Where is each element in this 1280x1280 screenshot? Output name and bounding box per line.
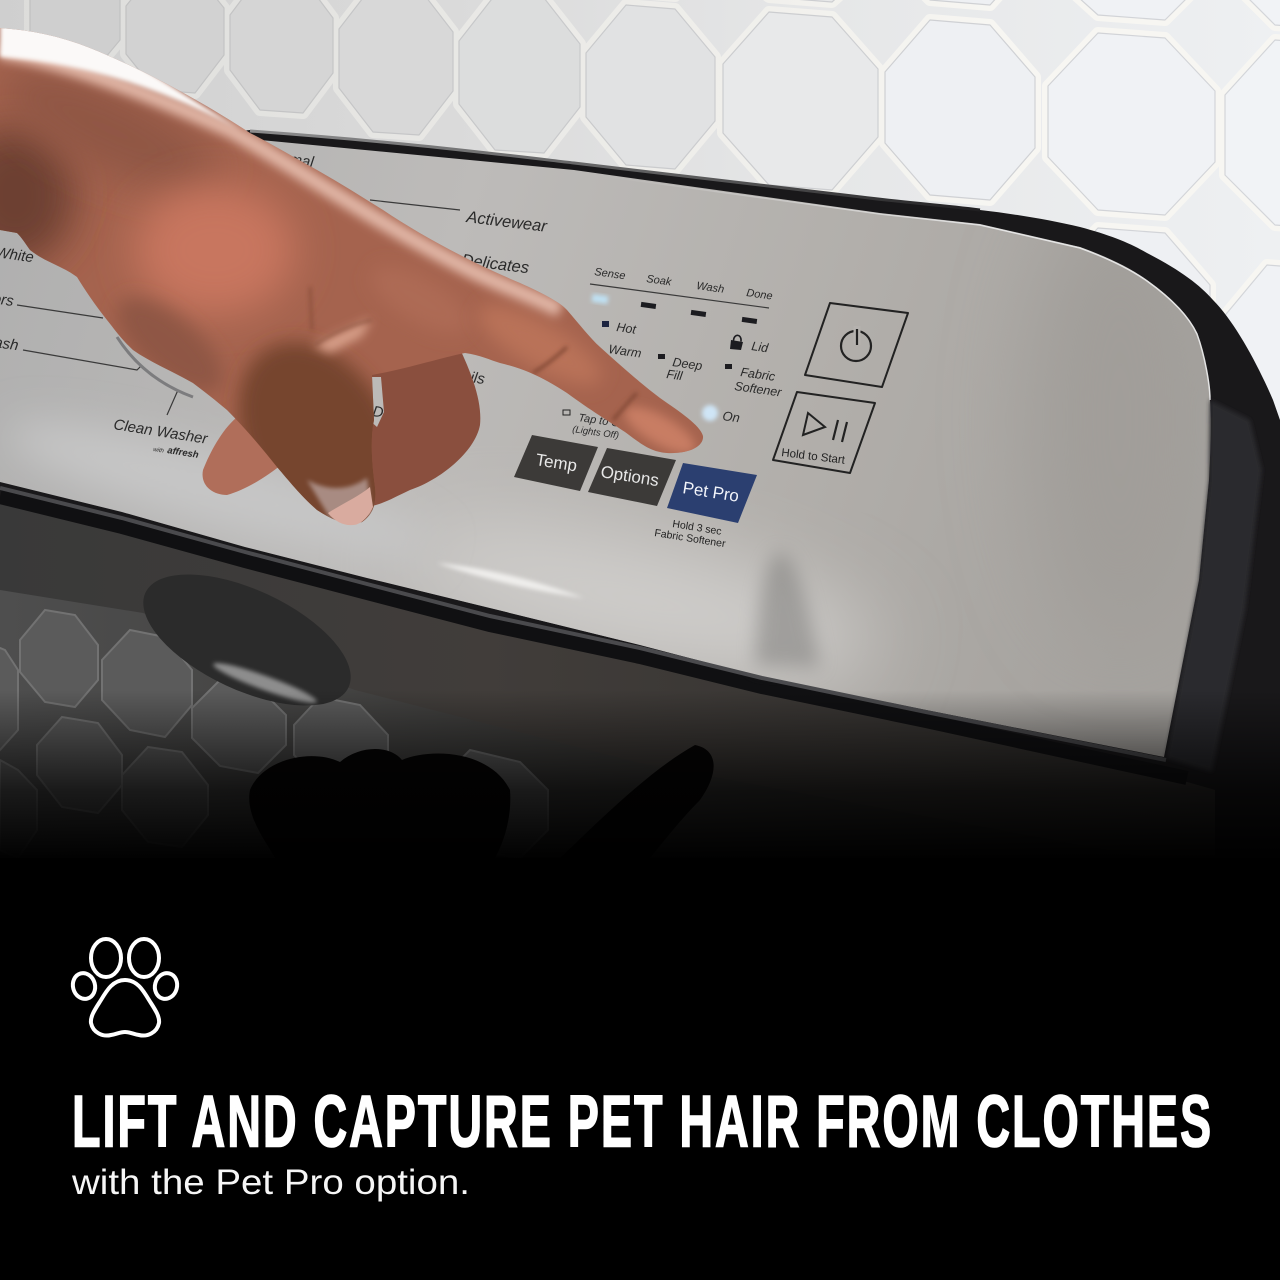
sunlit skin along top edge [0,52,560,310]
panel labels: Done [746,287,773,303]
lid chrome edge [0,497,1187,778]
temp, options and pet pro buttons: Hold 3 sec [672,518,722,538]
title: LIFT AND CAPTURE PET HAIR FROM CLOTHES [72,1081,1211,1162]
panel labels: Clean Washer [112,416,210,448]
temp, options and pet pro buttons: Pet Pro [681,478,740,506]
gap between thumb and finger [369,377,384,427]
power button [805,303,908,387]
right bezel band [1166,400,1262,772]
console rim highlight [574,172,1210,400]
silver console surface [0,140,1211,757]
finger shadow on console [755,552,820,668]
panel labels: Lid [751,339,770,355]
subtitle: with the Pet Pro option. [71,1163,470,1202]
panel labels: affresh [167,445,200,461]
gap label fragment: D [371,403,385,421]
panel labels: Sense [594,266,626,282]
black caption band [0,858,1280,1280]
panel labels: Normal [265,148,315,171]
thumbnail [328,487,373,525]
knob rim arc [117,337,193,397]
temp, options and pet pro buttons: Fabric Softener [654,527,727,550]
panel labels: Warm [608,342,642,361]
panel labels: Tap to Clean [578,412,641,433]
panel labels [0,148,783,461]
panel labels: Activewear [465,208,549,236]
panel labels: Soak [646,273,673,289]
panel labels: On [722,408,741,425]
photo: wall of white octagon tiles [0,0,1280,460]
washer dark bezel [0,130,1280,858]
panel labels: Fabric [740,365,777,384]
temp, options and pet pro buttons: Options [599,462,660,490]
palm, index finger and thumb [0,28,703,522]
little finger [203,418,285,495]
panel labels: (Lights Off) [572,424,620,442]
panel labels: Fill [666,367,685,383]
reflected tiles [0,609,549,826]
temp, options and pet pro buttons [514,435,757,550]
panel labels: Wash [696,280,725,296]
panel labels: Deep [672,355,703,373]
console gloss streak [437,563,584,598]
chrome edge upper grey [0,488,1166,760]
reflected hand [249,745,714,858]
photo: washer control console [0,130,1280,844]
lower glass lid [0,504,1188,840]
panel labels: Soils [451,367,486,388]
panel labels: Delicates [461,251,530,277]
bezel grey upper edge [250,131,980,210]
white overexposed highlight [0,28,236,128]
panel labels: with [153,447,165,455]
bottom fade to black [0,690,1280,858]
reflected knob [124,547,370,733]
panel labels: Hot [616,320,637,337]
panel labels: Softener [734,379,783,400]
hand pressing button [0,28,703,526]
curled middle finger [340,345,480,506]
start button [773,392,875,473]
start button: Hold to Start [781,447,846,467]
reflected panel band [0,504,341,650]
icon: paw print [70,939,180,1036]
thumb cuticle [307,478,372,518]
temp, options and pet pro buttons: Temp [534,450,578,475]
status indicator lights [563,294,757,421]
